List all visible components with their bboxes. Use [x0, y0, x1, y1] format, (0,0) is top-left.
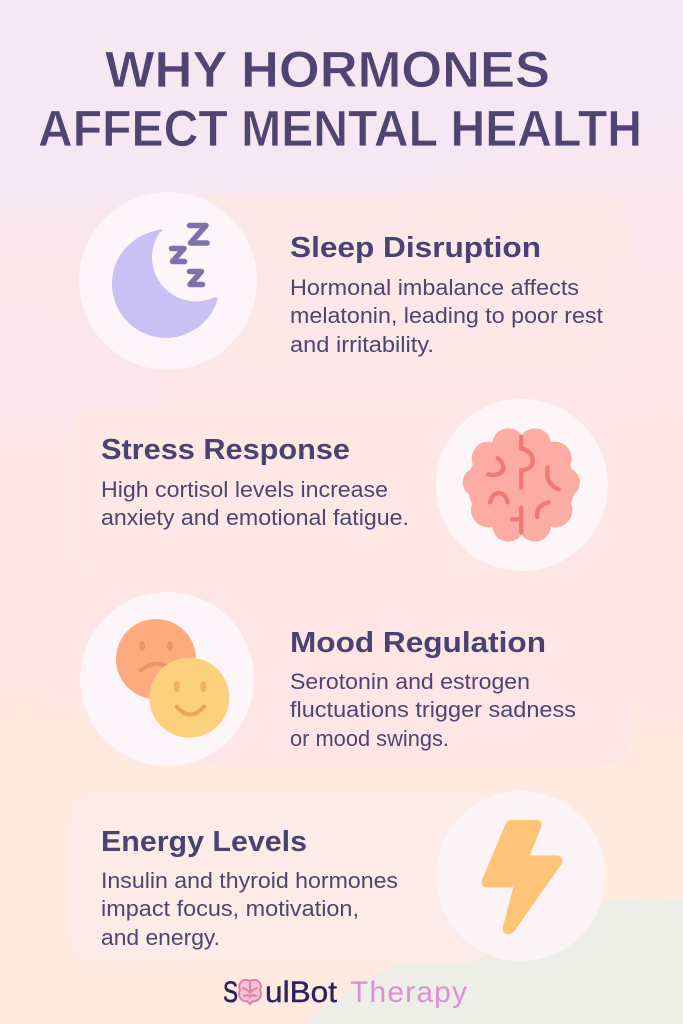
- text: energy description: Insulin and thyroid hormones: [101, 868, 398, 893]
- icon: sad and happy faces: [80, 592, 254, 766]
- text: stress description: High cortisol levels increase: [101, 477, 388, 502]
- icon: moon with zzz: [79, 192, 257, 370]
- logo: SoulBot Therapy: ulBot: [265, 976, 338, 1009]
- text: mood description: fluctuations trigger sadness: [290, 697, 576, 722]
- title: [38, 41, 642, 157]
- text: stress description: [101, 477, 409, 530]
- text: energy description: and energy.: [101, 925, 220, 950]
- title: AFFECT MENTAL HEALTH: [38, 100, 642, 157]
- logo: SoulBot Therapy: [223, 976, 467, 1009]
- heading: energy levels: Energy Levels: [101, 826, 307, 858]
- logo: SoulBot Therapy: Therapy: [350, 976, 467, 1009]
- title: WHY HORMONES: [105, 41, 550, 98]
- panel: sleep disruption: [79, 192, 631, 373]
- panel: mood regulation: [80, 592, 631, 766]
- icon: lightning bolt: [436, 791, 606, 961]
- panel: energy levels: [67, 791, 606, 962]
- text: energy description: [101, 868, 398, 950]
- heading: mood regulation: Mood Regulation: [290, 627, 546, 659]
- text: sleep description: melatonin, leading to poor rest: [290, 303, 603, 328]
- text: mood description: or mood swings.: [290, 726, 449, 751]
- text: sleep description: and irritability.: [290, 332, 434, 357]
- text: stress description: anxiety and emotional fatigue.: [101, 505, 409, 530]
- heading: sleep disruption: Sleep Disruption: [290, 232, 541, 264]
- text: mood description: [290, 669, 576, 751]
- text: sleep description: [290, 275, 603, 357]
- text: sleep description: Hormonal imbalance affects: [290, 275, 579, 300]
- text: mood description: Serotonin and estrogen: [290, 669, 530, 694]
- icon: brain: [436, 399, 608, 571]
- logo: SoulBot Therapy: S: [223, 976, 238, 1009]
- panel: stress response: [68, 399, 608, 571]
- heading: stress response: Stress Response: [101, 434, 350, 466]
- icon: logo brain: [239, 980, 261, 1004]
- text: energy description: impact focus, motivation,: [101, 896, 359, 921]
